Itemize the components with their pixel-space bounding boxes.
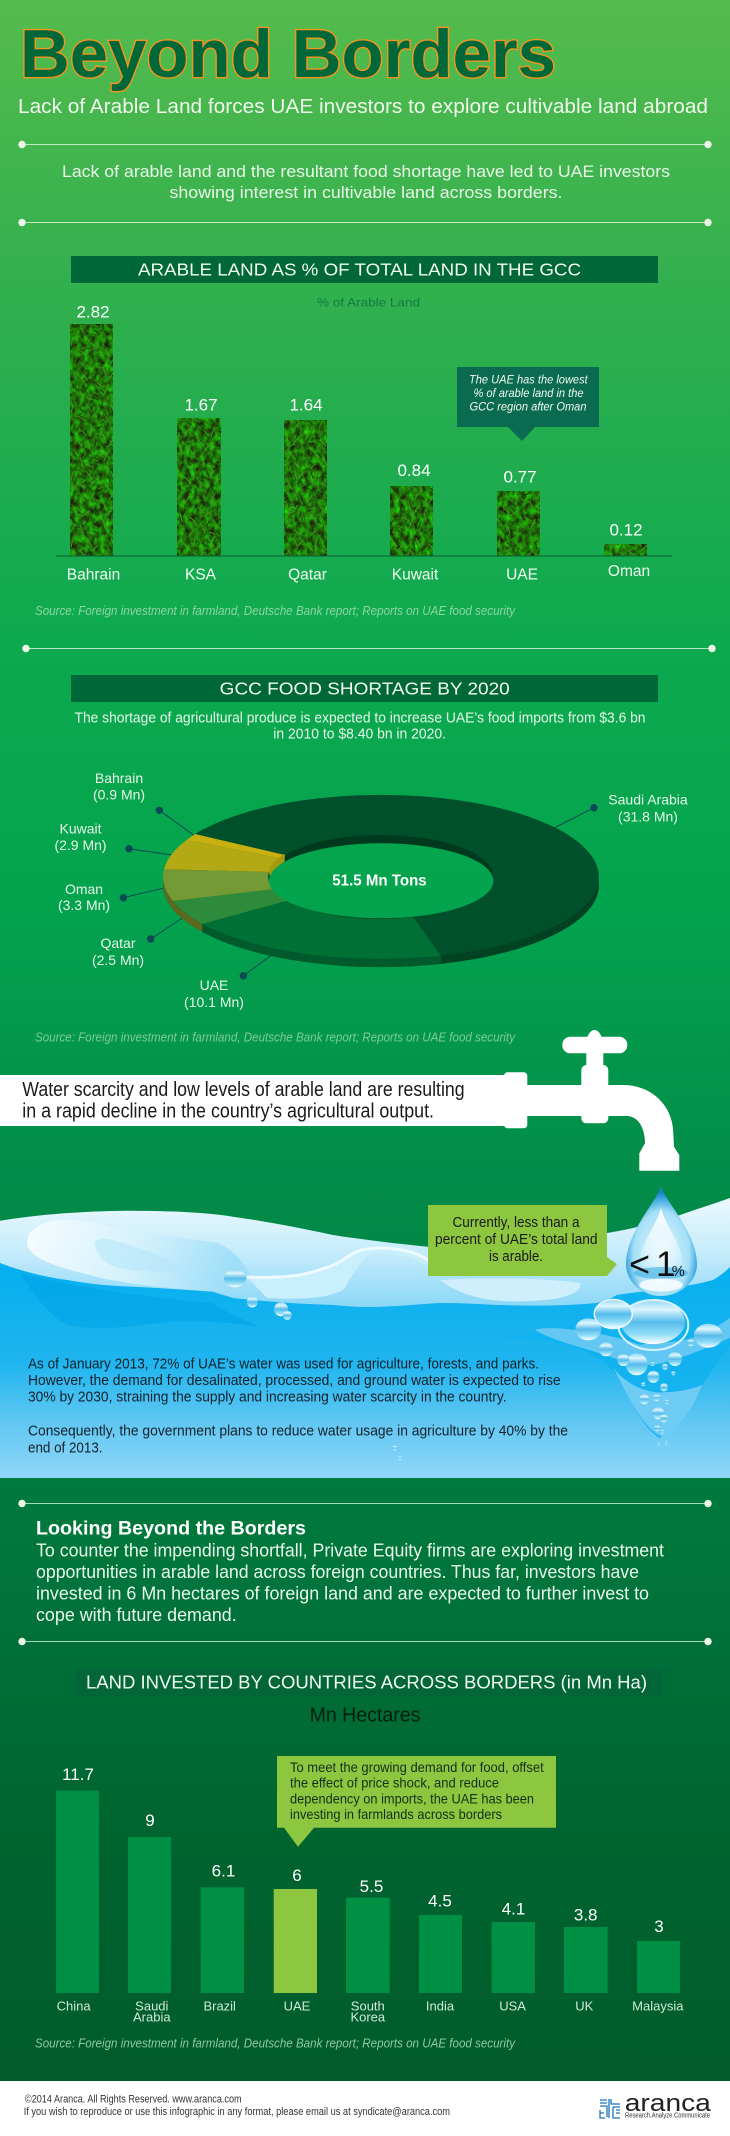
bar labels bbox=[67, 563, 650, 583]
axis title: % of Arable Land bbox=[317, 296, 420, 310]
donut inner wall bbox=[269, 835, 493, 918]
bar labels bbox=[57, 1999, 684, 2025]
inner swirl bbox=[95, 1239, 190, 1272]
section paragraph: cope with future demand. bbox=[36, 1604, 237, 1625]
bar values: 0.84 bbox=[397, 461, 431, 480]
water text: end of 2013. bbox=[28, 1439, 102, 1456]
water text: However, the demand for desalinated, processed, and ground water is expected to rise bbox=[28, 1372, 561, 1389]
donut intro text bbox=[74, 710, 646, 743]
aranca logo: Research.Analyze.Communicate bbox=[625, 2112, 710, 2120]
callout: UAE lowest: The UAE has the lowest bbox=[469, 372, 588, 386]
right swirl bbox=[440, 1278, 580, 1301]
white swoosh bbox=[247, 1248, 428, 1299]
3D donut bbox=[163, 795, 599, 967]
water drop bbox=[626, 1186, 697, 1296]
less than one percent figure: < bbox=[629, 1244, 650, 1284]
bar values: 0.77 bbox=[503, 467, 537, 486]
water text: Consequently, the government plans to reduce water usage in agriculture by 40% by the bbox=[28, 1423, 568, 1440]
segment: Qatar bbox=[173, 889, 287, 924]
bar labels: UAE bbox=[284, 1999, 311, 2014]
green tap bbox=[0, 1030, 679, 1171]
callout: under one percent: is arable. bbox=[489, 1248, 543, 1265]
panel: water section bbox=[0, 1030, 730, 1478]
bar values: 6 bbox=[292, 1866, 302, 1885]
donut labels: (3.3 Mn) bbox=[58, 897, 110, 913]
aranca logo: aranca bbox=[625, 2090, 712, 2117]
callout: UAE lowest: % of arable land in the bbox=[474, 386, 584, 400]
bar labels: South bbox=[351, 1999, 385, 2014]
axis title: Mn Hectares bbox=[310, 1704, 420, 1726]
bar values: 9 bbox=[145, 1811, 155, 1830]
donut labels: UAE bbox=[200, 977, 228, 993]
water foam band bbox=[0, 1198, 730, 1312]
donut labels: Oman bbox=[65, 881, 103, 897]
axis line bbox=[44, 1992, 687, 1994]
copyright text: ©2014 Aranca. All Rights Reserved. www.aranca.com bbox=[25, 2094, 242, 2106]
intro text: Lack of arable land and the resultant food shortage have led to UAE investors bbox=[62, 163, 670, 181]
panel: land invested bar chart bbox=[35, 1669, 687, 2050]
bar labels: Korea bbox=[350, 2010, 386, 2025]
section paragraph: opportunities in arable land across foreign countries. Thus far, investors have bbox=[36, 1561, 639, 1582]
less than one percent figure: % bbox=[672, 1263, 685, 1280]
bar values: 4.1 bbox=[502, 1900, 525, 1919]
source note: Source: Foreign investment in farmland, Deutsche Bank report; Reports on UAE food security bbox=[35, 1031, 516, 1045]
donut labels: (2.5 Mn) bbox=[92, 952, 144, 968]
donut labels: Bahrain bbox=[95, 770, 143, 786]
chart heading text: LAND INVESTED BY COUNTRIES ACROSS BORDERS (in Mn Ha) bbox=[86, 1673, 647, 1693]
panel: food shortage donut bbox=[35, 675, 688, 1045]
subtitle: Lack of Arable Land forces UAE investors to explore cultivable land abroad bbox=[18, 96, 708, 118]
segment: UAE bbox=[202, 901, 441, 959]
donut labels: (31.8 Mn) bbox=[618, 808, 678, 824]
section paragraph bbox=[36, 1540, 664, 1625]
callout: investing in farmlands bbox=[277, 1756, 556, 1847]
less than one percent figure bbox=[629, 1244, 685, 1284]
donut heading band bbox=[71, 675, 658, 702]
water funnel bbox=[507, 1310, 730, 1438]
water shadow bbox=[20, 1273, 260, 1328]
chart heading text: ARABLE LAND AS % OF TOTAL LAND IN THE GCC bbox=[138, 260, 581, 280]
bar labels: Bahrain bbox=[67, 566, 120, 583]
leader lines bbox=[120, 804, 598, 979]
copyright text: If you wish to reproduce or use this infographic in any format, please email us at syndicate@aranca.com bbox=[24, 2106, 450, 2118]
bar labels: China bbox=[57, 1999, 91, 2014]
bar labels: Malaysia bbox=[632, 1999, 684, 2014]
callout: investing in farmlands: the effect of price shock, and reduce bbox=[290, 1775, 499, 1791]
tap banner text: in a rapid decline in the country’s agricultural output. bbox=[22, 1100, 434, 1122]
bar labels: KSA bbox=[185, 566, 217, 583]
callout: under one percent bbox=[428, 1205, 617, 1276]
copyright text bbox=[24, 2094, 450, 2118]
bar values: 11.7 bbox=[62, 1765, 94, 1784]
water text: 30% by 2030, straining the supply and increasing water scarcity in the country. bbox=[28, 1389, 507, 1406]
bar values bbox=[62, 1765, 664, 1936]
donut heading text: GCC FOOD SHORTAGE BY 2020 bbox=[220, 679, 510, 699]
tap banner text: Water scarcity and low levels of arable land are resulting bbox=[22, 1079, 465, 1101]
bar values: 3.8 bbox=[574, 1905, 598, 1924]
bar labels: Oman bbox=[608, 563, 650, 580]
segment: Saudi Arabia bbox=[195, 795, 599, 956]
donut intro text: The shortage of agricultural produce is expected to increase UAE’s food imports from $3.6 bn bbox=[74, 710, 646, 726]
bar labels: Arabia bbox=[133, 2010, 171, 2025]
callout: under one percent: Currently, less than a bbox=[452, 1214, 580, 1231]
segment: Oman bbox=[163, 869, 273, 901]
callout: UAE lowest: GCC region after Oman bbox=[470, 400, 587, 414]
donut labels: Qatar bbox=[100, 935, 136, 951]
bar labels: Kuwait bbox=[392, 566, 439, 583]
bar values: 3 bbox=[654, 1917, 664, 1936]
bar labels: USA bbox=[499, 1999, 526, 2014]
callout: investing in farmlands: investing in farmlands across borders bbox=[290, 1806, 502, 1822]
bar values: 1.64 bbox=[289, 396, 323, 415]
water text bbox=[28, 1355, 568, 1456]
foam swirl bbox=[27, 1220, 250, 1292]
funnel ribbon bbox=[535, 1318, 730, 1366]
donut hole bbox=[269, 843, 493, 918]
bar values: 5.5 bbox=[360, 1877, 383, 1896]
donut labels: Kuwait bbox=[59, 821, 102, 837]
donut labels: (0.9 Mn) bbox=[93, 786, 145, 802]
segment: Kuwait bbox=[164, 840, 279, 872]
section paragraph: invested in 6 Mn hectares of foreign land and are expected to further invest to bbox=[36, 1582, 649, 1603]
bar values: 0.12 bbox=[609, 521, 643, 540]
footer bbox=[0, 2081, 730, 2136]
title: Beyond Borders bbox=[20, 16, 556, 92]
donut side wall bbox=[163, 803, 599, 967]
callout: under one percent: percent of UAE’s total land bbox=[435, 1231, 598, 1248]
intro dividers bbox=[18, 141, 712, 226]
bar labels: UK bbox=[575, 1999, 594, 2014]
less than one percent figure: 1 bbox=[656, 1245, 675, 1284]
donut labels: Saudi Arabia bbox=[608, 792, 688, 808]
bar values: 4.5 bbox=[428, 1892, 452, 1911]
callout: investing in farmlands: To meet the growing demand for food, offset bbox=[290, 1759, 544, 1775]
bar values: 2.82 bbox=[76, 302, 110, 321]
text block: looking beyond bbox=[36, 1517, 664, 1625]
section heading: Looking Beyond the Borders bbox=[36, 1517, 306, 1539]
section paragraph: To counter the impending shortfall, Private Equity firms are exploring investment bbox=[36, 1540, 664, 1561]
chart heading band bbox=[75, 1669, 662, 1696]
intro text: showing interest in cultivable land across borders. bbox=[170, 184, 562, 202]
callout: UAE lowest bbox=[457, 367, 599, 441]
donut labels: (2.9 Mn) bbox=[54, 837, 107, 853]
bar values: 1.67 bbox=[184, 396, 218, 415]
donut labels: (10.1 Mn) bbox=[184, 994, 244, 1010]
chart heading band bbox=[71, 256, 658, 283]
bar labels: Saudi bbox=[135, 1999, 169, 2014]
donut labels bbox=[54, 770, 688, 1010]
bar labels: India bbox=[426, 1999, 455, 2014]
aranca logo bbox=[600, 2090, 712, 2120]
bar values bbox=[76, 302, 643, 540]
source note: Source: Foreign investment in farmland, Deutsche Bank report; Reports on UAE food security bbox=[35, 604, 516, 618]
panel: arable land bar chart bbox=[35, 256, 672, 618]
water body bbox=[0, 1263, 730, 1478]
tap banner text bbox=[22, 1079, 465, 1122]
axis line bbox=[56, 555, 672, 557]
segment: Bahrain bbox=[187, 834, 285, 858]
callout: investing in farmlands: dependency on imports, the UAE has been bbox=[290, 1790, 534, 1806]
intro text bbox=[62, 163, 670, 202]
bar values: 6.1 bbox=[212, 1862, 235, 1881]
funnel tip bbox=[613, 1367, 702, 1437]
source note: Source: Foreign investment in farmland, Deutsche Bank report; Reports on UAE food security bbox=[35, 2036, 516, 2050]
bars bbox=[56, 1791, 680, 1993]
donut intro text: in 2010 to $8.40 bn in 2020. bbox=[273, 727, 446, 743]
grass bars bbox=[60, 320, 660, 560]
bar labels: Qatar bbox=[288, 566, 327, 583]
donut centre total: 51.5 Mn Tons bbox=[332, 873, 427, 890]
bar labels: Brazil bbox=[203, 1999, 236, 2014]
bar labels: UAE bbox=[506, 566, 538, 583]
water text: As of January 2013, 72% of UAE’s water was used for agriculture, forests, and parks. bbox=[28, 1355, 539, 1372]
water bubbles bbox=[224, 1269, 723, 1460]
